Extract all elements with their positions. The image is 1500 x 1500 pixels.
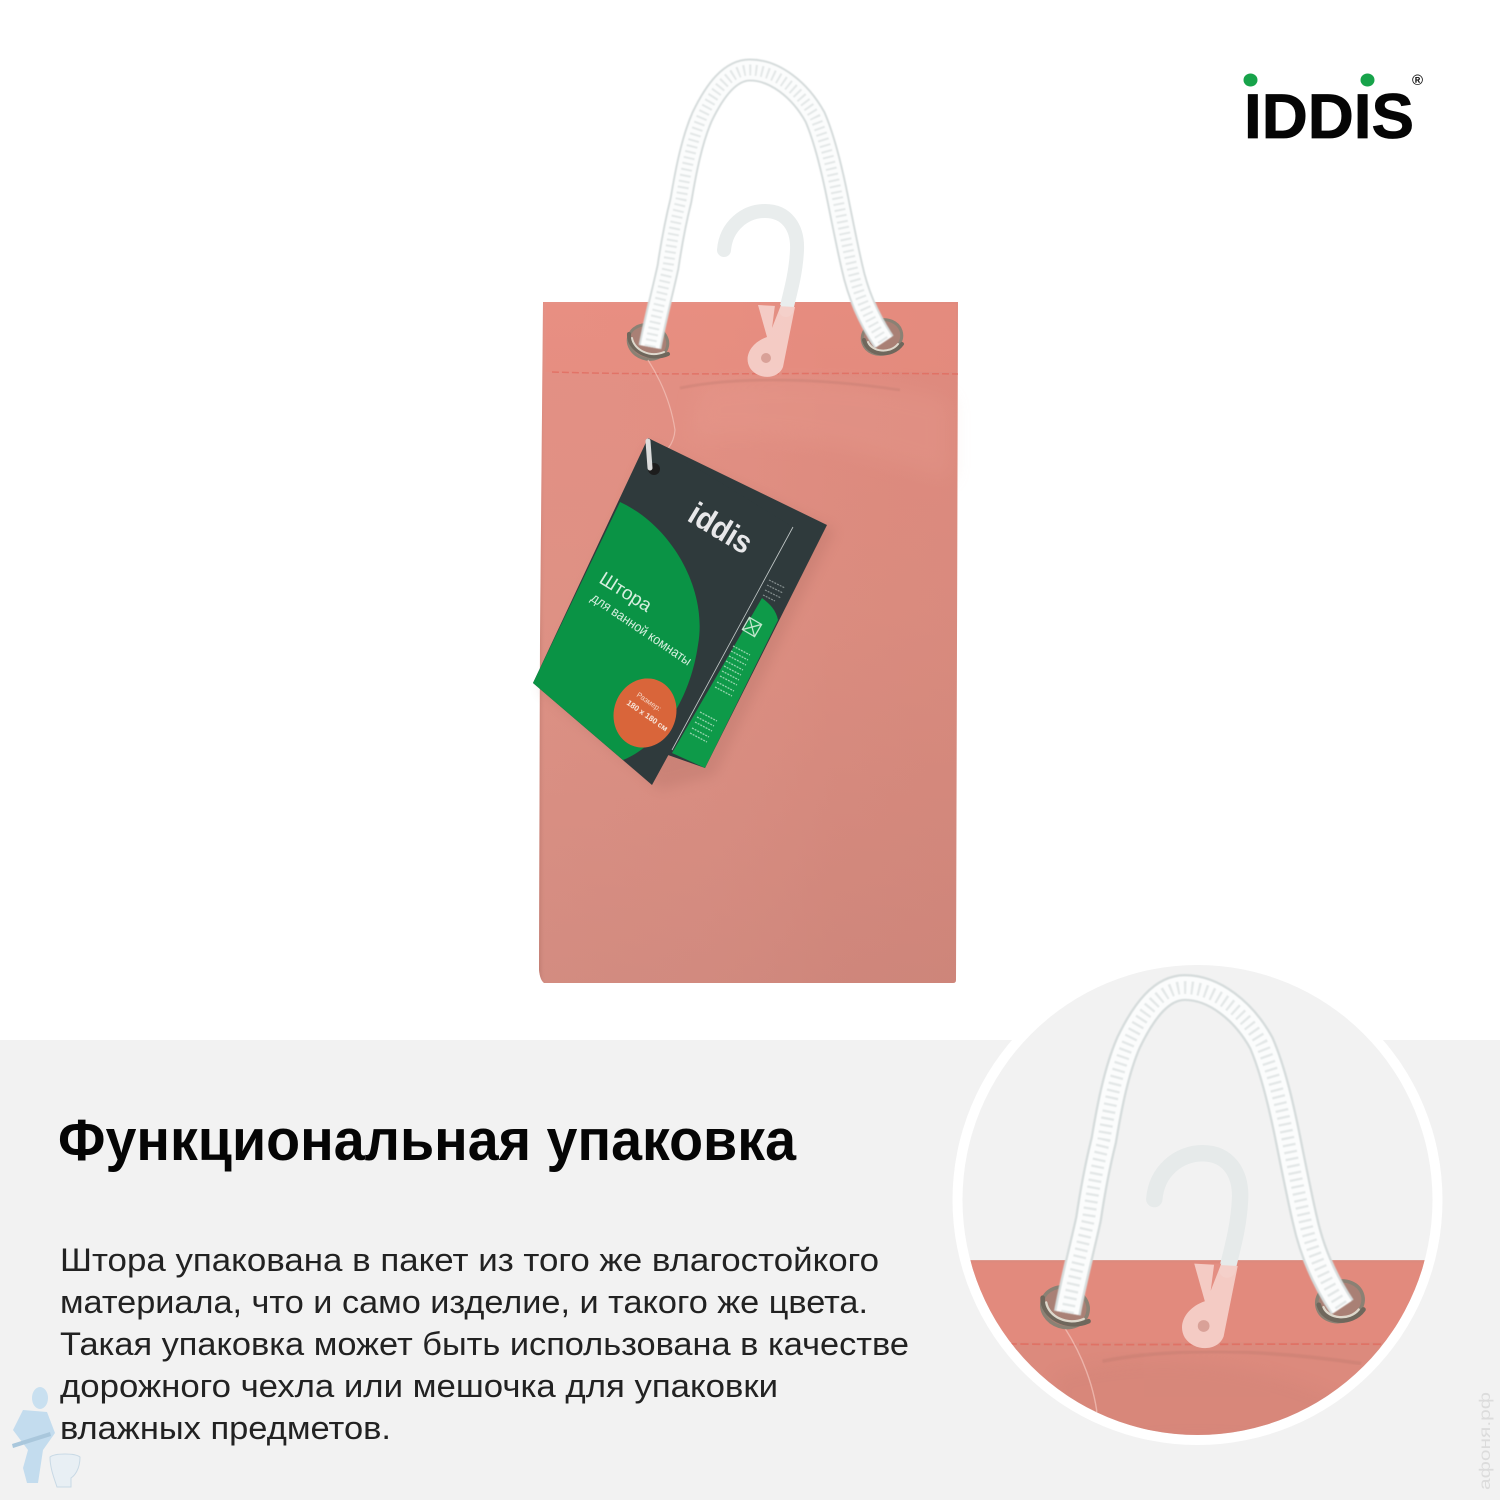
body text: материала, что и само изделие, и такого же цвета. — [60, 1284, 868, 1320]
tag subtitle: для ванной комнаты — [588, 590, 695, 668]
product tag — [533, 438, 835, 790]
toilet — [50, 1454, 80, 1487]
tag logo: iddis — [682, 495, 759, 561]
body text: дорожного чехла или мешочка для упаковки — [60, 1368, 778, 1404]
body text: влажных предметов. — [60, 1410, 391, 1446]
body text: Такая упаковка может быть использована в качестве — [60, 1326, 909, 1362]
watermark: site address: афоня.рф — [1477, 1392, 1494, 1490]
inset circle: close-up of handle — [952, 965, 1442, 1445]
tag back card — [648, 438, 827, 768]
watermark: plumber icon — [12, 1387, 80, 1487]
logo: IDDIS: ® — [1412, 72, 1423, 89]
bag body — [539, 302, 958, 983]
tag plastic tie — [648, 441, 650, 468]
tag eyelet — [648, 463, 660, 475]
logo: IDDIS: IDDIS — [1244, 82, 1414, 152]
tag size value: 180 x 180 см — [625, 698, 670, 733]
tag front edge — [672, 527, 793, 750]
plumber figure — [13, 1410, 55, 1483]
rope handle — [650, 70, 884, 347]
tag size label: Размер: — [635, 690, 663, 713]
thread — [648, 360, 675, 462]
bottom panel — [0, 1040, 1500, 1500]
heading: Функциональная упаковка — [58, 1108, 797, 1173]
inset product close-up — [970, 974, 1425, 1435]
body text — [60, 1242, 909, 1446]
plumber head — [32, 1387, 48, 1409]
tag shadow — [540, 445, 835, 790]
tag front card — [533, 438, 793, 785]
plastic hook — [724, 211, 797, 377]
body text: Штора упакована в пакет из того же влагостойкого — [60, 1242, 879, 1278]
tag orange circle — [604, 670, 686, 756]
care symbol — [742, 617, 762, 637]
tag back green — [672, 598, 778, 768]
product: bag with rope handle — [539, 70, 958, 983]
back card tiny text — [690, 646, 750, 742]
eyelets back — [624, 315, 906, 364]
inset background — [962, 965, 1432, 1435]
tag front green area — [533, 502, 700, 760]
white ring — [952, 955, 1442, 1445]
tag title: Штора — [595, 568, 656, 617]
plumber wrench — [12, 1432, 51, 1448]
eyelets front arcs — [629, 334, 902, 357]
